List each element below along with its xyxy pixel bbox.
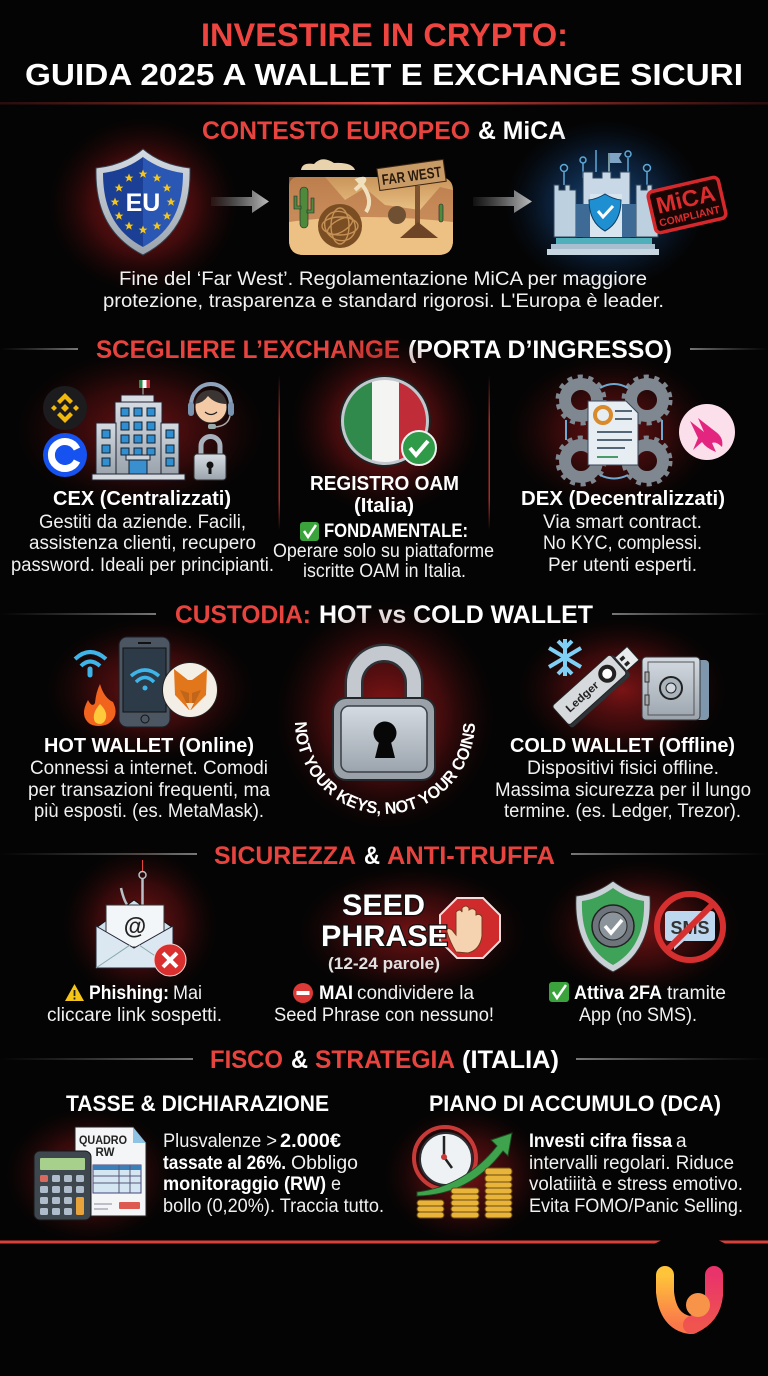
panel: sicurezza xyxy=(0,842,768,1026)
icon: MiCA castle xyxy=(547,150,727,255)
text block: DEX xyxy=(521,488,725,576)
heading: custodia: CUSTODIA: xyxy=(175,601,311,629)
text block: fine del far west: Fine del ‘Far West’. Regolamentazione MiCA per maggiore xyxy=(119,269,647,290)
heading: fisco e strategia: STRATEGIA xyxy=(315,1046,455,1074)
text block: registro OAM: Operare solo su piattaforme xyxy=(273,541,494,562)
heading: fisco e strategia: & xyxy=(291,1046,308,1074)
text block: tasse: 2.000€ xyxy=(280,1131,341,1152)
heading: scegliere l'exchange xyxy=(96,336,672,364)
text block: DEX: No KYC, complessi. xyxy=(543,533,702,554)
icon: 2FA shield xyxy=(576,881,650,972)
curved motto: not your keys, not your coins: NOT YOUR KEYS, NOT YOUR COINS xyxy=(294,722,475,816)
text block: cold wallet xyxy=(495,735,751,822)
text block: hot wallet xyxy=(28,735,270,822)
text block: DCA xyxy=(529,1131,743,1217)
text block: tasse: Obbligo xyxy=(291,1153,358,1174)
title xyxy=(25,17,743,92)
icon: EU shield: EU xyxy=(126,189,160,217)
text block: DCA: a xyxy=(676,1131,687,1152)
text block: registro OAM xyxy=(273,473,494,582)
icon: seed phrase stop sign: PHRASE xyxy=(321,920,448,953)
text block: seed phrase warning: MAI xyxy=(319,983,353,1004)
text block: 2FA: Attiva 2FA xyxy=(574,983,662,1004)
text block: seed phrase warning: condividere la xyxy=(357,983,474,1004)
icon: padlock xyxy=(194,436,226,480)
text block: DCA: Evita FOMO/Panic Selling. xyxy=(529,1196,743,1217)
heading: sicurezza: & xyxy=(364,842,380,870)
icon: Italian flag badge xyxy=(339,375,436,467)
text block: tasse: Plusvalenze > xyxy=(163,1131,277,1152)
heading: scegliere l'exchange: (PORTA D’INGRESSO) xyxy=(408,336,672,364)
text block: hot wallet: HOT WALLET (Online) xyxy=(44,735,254,757)
text block: registro OAM: FONDAMENTALE: xyxy=(324,521,468,542)
icon: smart contract gears xyxy=(558,377,670,484)
heading: fisco e strategia: (ITALIA) xyxy=(462,1046,559,1074)
text block: CEX: CEX (Centralizzati) xyxy=(53,488,231,510)
text block: DCA: volatiiità e stress emotivo. xyxy=(529,1174,743,1195)
icon: seed phrase stop sign: (12-24 parole) xyxy=(328,955,440,973)
stamp: MiCA compliant: MiCA xyxy=(653,180,718,219)
icon: quadro RW document xyxy=(75,1127,146,1216)
title: GUIDA 2025 A WALLET E EXCHANGE SICURI xyxy=(25,57,743,92)
heading: sicurezza: SICUREZZA xyxy=(214,842,356,870)
text block: hot wallet: più esposti. (es. MetaMask). xyxy=(34,801,264,822)
text block: DEX: DEX (Decentralizzati) xyxy=(521,488,725,510)
text block: 2FA xyxy=(549,982,726,1026)
heading: sicurezza: ANTI-TRUFFA xyxy=(387,842,555,870)
heading: sicurezza xyxy=(214,842,555,870)
text block: cold wallet: Massima sicurezza per il lungo xyxy=(495,780,751,801)
text block: hot wallet: per transazioni frequenti, ma xyxy=(28,780,270,801)
text block: CEX xyxy=(11,488,274,576)
panel: fisco e strategia xyxy=(0,1046,768,1243)
icon: exchange building xyxy=(92,380,185,480)
icon: logo xyxy=(665,1275,714,1325)
icon: coinbase xyxy=(43,433,87,477)
text block: cold wallet: COLD WALLET (Offline) xyxy=(510,735,735,757)
icon: calculator xyxy=(34,1151,91,1220)
text block: phishing: Phishing: xyxy=(89,983,169,1004)
title: INVESTIRE IN CRYPTO: xyxy=(201,17,568,53)
panel: contesto europeo xyxy=(48,117,727,312)
arrow xyxy=(473,190,532,213)
text block: seed phrase warning xyxy=(274,983,494,1026)
text block: CEX: password. Ideali per principianti. xyxy=(11,555,274,576)
heading: fisco e strategia: FISCO xyxy=(210,1046,283,1074)
text block: DCA: intervalli regolari. Riduce xyxy=(529,1153,734,1174)
text block: phishing: Mai xyxy=(173,983,202,1004)
heading: fisco e strategia xyxy=(210,1046,559,1074)
text block: tasse: monitoraggio (RW) xyxy=(163,1174,326,1195)
icon: EU shield xyxy=(96,149,190,255)
icon: central padlock xyxy=(333,653,435,780)
heading: custodia xyxy=(175,601,593,629)
text block: cold wallet: termine. (es. Ledger, Trezor). xyxy=(504,801,741,822)
text block: tasse: bollo (0,20%). Traccia tutto. xyxy=(163,1196,384,1217)
text block: DCA: Investi cifra fissa xyxy=(529,1131,672,1152)
text block: phishing xyxy=(47,983,222,1026)
icon: uniswap xyxy=(679,404,735,460)
subheading: tasse: TASSE & DICHIARAZIONE xyxy=(66,1091,329,1116)
icon: far west desert: FAR WEST xyxy=(381,164,443,189)
heading: contesto europeo: CONTESTO EUROPEO xyxy=(202,117,470,145)
text block: fine del far west: protezione, trasparenza e standard rigorosi. L'Europa è leader. xyxy=(103,291,664,312)
text block: CEX: Gestiti da aziende. Facili, xyxy=(39,512,246,533)
text block: tasse: e xyxy=(331,1174,341,1195)
stamp: MiCA compliant xyxy=(647,176,727,234)
icon: no SMS: SMS xyxy=(670,918,710,938)
text block: phishing: cliccare link sospetti. xyxy=(47,1005,222,1026)
subheading: piano di accumulo: PIANO DI ACCUMULO (DCA) xyxy=(429,1091,721,1116)
text block: hot wallet: Connessi a internet. Comodi xyxy=(30,758,268,779)
icon: cold wallet: Ledger xyxy=(564,679,602,715)
text block: cold wallet: Dispositivi fisici offline. xyxy=(527,758,719,779)
text block: seed phrase warning: Seed Phrase con nessuno! xyxy=(274,1005,494,1026)
icon: phishing envelope xyxy=(96,860,186,976)
icon: quadro RW document: QUADRO xyxy=(79,1135,127,1147)
icon: phishing envelope: @ xyxy=(124,913,146,939)
heading: contesto europeo: & MiCA xyxy=(478,117,566,145)
text block: tasse xyxy=(163,1131,384,1217)
panel: scegliere l'exchange xyxy=(0,335,768,582)
icon: seed phrase stop sign: SEED xyxy=(342,889,425,922)
text block: DEX: Per utenti esperti. xyxy=(548,555,697,576)
heading: custodia: HOT vs COLD WALLET xyxy=(319,601,593,629)
icon: clock and growth chart xyxy=(414,1127,512,1196)
icon: seed phrase stop sign xyxy=(321,889,500,973)
icon: hot wallet phone xyxy=(75,637,218,727)
icon: cold wallet xyxy=(549,639,709,729)
text block: tasse: tassate al 26%. xyxy=(163,1153,286,1174)
icon: coin stacks xyxy=(417,1168,512,1218)
text block: 2FA: tramite xyxy=(667,983,726,1004)
icon: quadro RW document: RW xyxy=(96,1147,115,1159)
icon: binance xyxy=(43,386,87,430)
text block: DEX: Via smart contract. xyxy=(543,512,702,533)
icon: support agent xyxy=(188,384,234,429)
text block: registro OAM: REGISTRO OAM xyxy=(310,473,459,495)
icon: far west desert xyxy=(289,159,453,255)
stamp: MiCA compliant: COMPLIANT xyxy=(658,204,722,230)
heading: scegliere l'exchange: SCEGLIERE L’EXCHANGE xyxy=(96,336,400,364)
text block: CEX: assistenza clienti, recupero xyxy=(29,533,256,554)
text block: registro OAM: iscritte OAM in Italia. xyxy=(303,561,466,582)
text block: registro OAM: (Italia) xyxy=(354,495,414,517)
panel: custodia xyxy=(16,601,753,822)
icon: no SMS xyxy=(657,894,723,960)
arrow xyxy=(211,190,269,213)
text block: fine del far west xyxy=(103,269,664,312)
text block: 2FA: App (no SMS). xyxy=(579,1005,697,1026)
